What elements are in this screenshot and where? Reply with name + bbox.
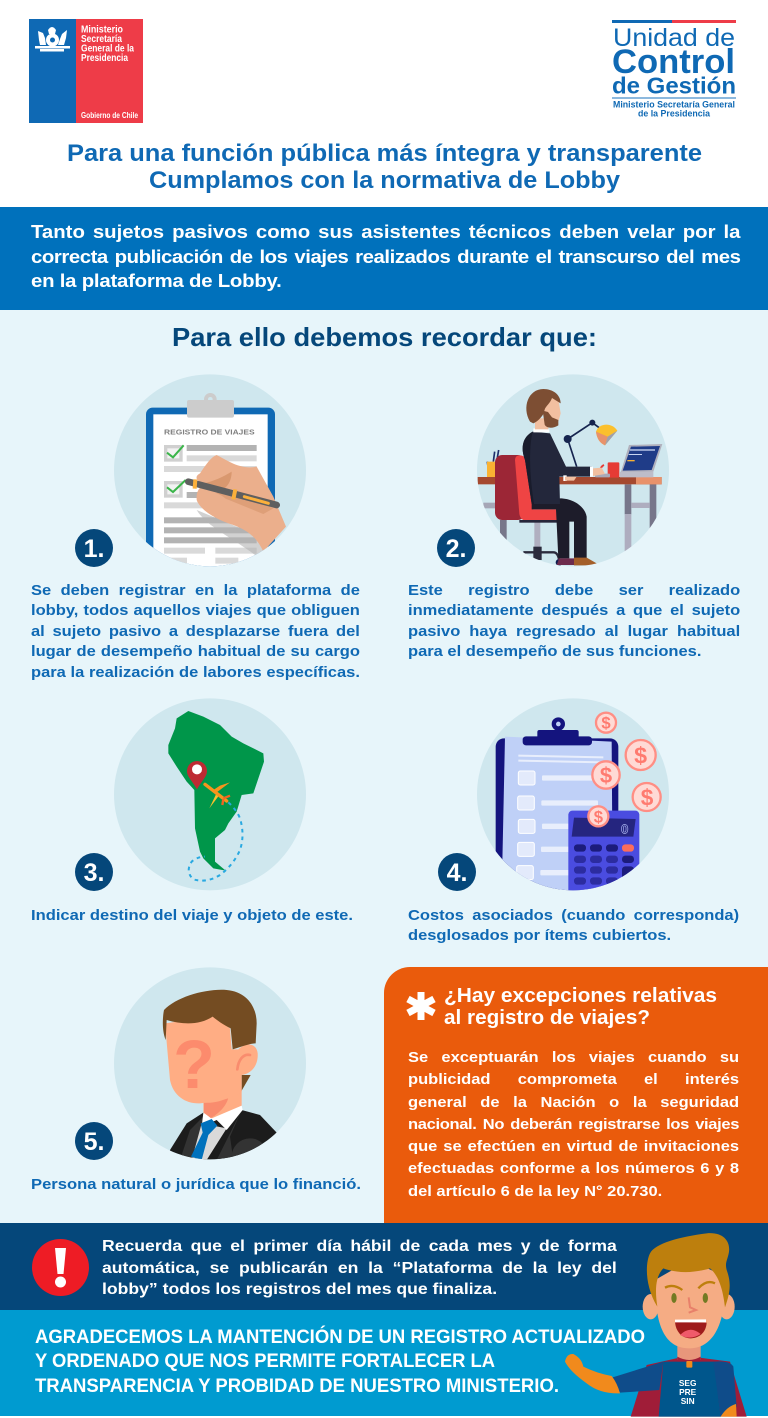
text: step 1: al sujeto pasivo a desplazarse fuera del — [31, 623, 360, 640]
illustration 4: clipboard, calculator and coins: $ — [634, 742, 647, 768]
badge: 4 — [438, 853, 476, 891]
text: step 5: Persona natural o jurídica que lo financió. — [31, 1176, 361, 1193]
title: Cumplamos con la normativa de Lobby — [149, 167, 621, 194]
text: step 1: lobby, todos aquellos viajes que obliguen — [31, 602, 360, 619]
text: step 4 — [408, 907, 739, 944]
logo: Unidad de Control de Gestión: Unidad de — [613, 24, 735, 52]
panel: light content background — [0, 310, 768, 1223]
badge: 2 — [437, 529, 475, 567]
text: step 2: Este registro debe ser realizado — [408, 582, 740, 599]
text: exceptions body: que se efectúen en virtud de invitaciones — [408, 1138, 739, 1155]
logo: Ministerio Secretaría General de la Presidencia: Ministerio — [81, 24, 123, 36]
illustration 1: clipboard with hand — [114, 374, 306, 566]
icon: asterisk — [406, 992, 436, 1020]
text: exceptions body: Se exceptuarán los viajes cuando su — [408, 1049, 739, 1066]
badge: 5 — [75, 1122, 113, 1160]
text: exceptions body — [408, 1049, 739, 1200]
title: Para una función pública más íntegra y transparente — [67, 140, 702, 167]
text: exceptions body: general de la Nación o la seguridad — [408, 1094, 739, 1111]
illustration 4: clipboard, calculator and coins: $ — [641, 784, 654, 810]
text: reminder — [102, 1238, 617, 1298]
text: step 4: desglosados por ítems cubiertos. — [408, 927, 671, 944]
text: thanks: AGRADECEMOS LA MANTENCIÓN DE UN REGISTRO ACTUALIZADO — [35, 1326, 645, 1348]
illustration 4: clipboard, calculator and coins — [477, 698, 669, 890]
illustration: superhero character — [565, 1233, 747, 1417]
heading: exceptions: al registro de viajes? — [444, 1007, 650, 1029]
heading: recordar: Para ello debemos recordar que: — [172, 322, 597, 352]
text: thanks — [35, 1326, 645, 1397]
logo: Unidad de Control de Gestión: Ministerio Secretaría General — [613, 100, 735, 110]
intro text: en la plataforma de Lobby. — [31, 270, 282, 291]
intro text: correcta publicación de los viajes realizados durante el transcurso del mes — [31, 246, 740, 266]
logo: Ministerio Secretaría General de la Presidencia: Gobierno de Chile — [81, 110, 138, 120]
text: step 2: para el desempeño de sus funciones. — [408, 643, 701, 660]
text: step 4: Costos asociados (cuando corresponda) — [408, 907, 739, 924]
intro text: Tanto sujetos pasivos como sus asistentes técnicos deben velar por la — [31, 221, 740, 242]
band: intro background — [0, 207, 768, 310]
text: step 2 — [408, 582, 740, 660]
heading: exceptions — [444, 985, 717, 1029]
badge: 1 — [75, 529, 113, 567]
logo: Ministerio Secretaría General de la Presidencia: Presidencia — [81, 53, 128, 64]
badge: 2: 2. — [446, 535, 466, 563]
text: step 1 — [31, 582, 360, 681]
text: step 2: inmediatamente después a que el sujeto — [408, 602, 740, 619]
logo: Unidad de Control de Gestión: de la Presidencia — [638, 108, 711, 118]
text: step 3: Indicar destino del viaje y objeto de este. — [31, 907, 353, 924]
logo: Unidad de Control de Gestión — [612, 20, 736, 118]
heading: exceptions: ¿Hay excepciones relativas — [444, 985, 717, 1007]
illustration: superhero character: PRE — [679, 1387, 697, 1397]
badge: 3: 3. — [84, 859, 104, 887]
logo: Ministerio Secretaría General de la Presidencia: General de la — [81, 44, 134, 54]
title — [67, 140, 702, 194]
text: step 2: pasivo haya regresado al lugar habitual — [408, 623, 740, 640]
panel: exceptions — [384, 967, 768, 1223]
illustration 4: clipboard, calculator and coins: $ — [594, 807, 604, 826]
intro text — [31, 221, 741, 291]
logo: Ministerio Secretaría General de la Presidencia: Secretaría — [81, 34, 122, 45]
logo: Unidad de Control de Gestión: Control — [612, 43, 735, 81]
illustration 1: clipboard with hand: REGISTRO DE VIAJES — [164, 428, 255, 437]
badge: 1: 1. — [84, 535, 104, 563]
text: exceptions body: nacional. No deberán registrarse los viajes — [408, 1116, 739, 1133]
text: exceptions body: publicidad comprometa el interés — [408, 1071, 739, 1088]
logo: Ministerio Secretaría General de la Presidencia — [29, 19, 143, 123]
text: exceptions body: del artículo 6 de la ley N° 20.730. — [408, 1183, 662, 1200]
text: step 1: Se deben registrar en la plataforma de — [31, 582, 360, 599]
text: step 1: lugar de desempeño habitual de su cargo — [31, 643, 360, 660]
text: thanks: TRANSPARENCIA Y PROBIDAD DE NUESTRO MINISTERIO. — [35, 1376, 559, 1397]
illustration: superhero character: SIN — [681, 1396, 695, 1406]
text: reminder: lobby” todos los registros del mes que finaliza. — [102, 1281, 497, 1298]
text: reminder: Recuerda que el primer día hábil de cada mes y de forma — [102, 1238, 617, 1255]
logo: Unidad de Control de Gestión: de Gestión — [612, 72, 736, 98]
illustration 5: anonymous person: ? — [173, 1027, 215, 1103]
text: thanks: Y ORDENADO QUE NOS PERMITE FORTALECER LA — [35, 1351, 495, 1372]
badge: 5: 5. — [84, 1128, 104, 1156]
band: reminder background — [0, 1223, 768, 1310]
text: step 1: para la realización de labores específicas. — [31, 664, 360, 681]
text: exceptions body: efectuadas conforme a los números 6 y 8 — [408, 1160, 739, 1177]
text: reminder: automática, se publicarán en la “Plataforma de la ley del — [102, 1260, 617, 1277]
illustration 2: person at desk — [477, 374, 669, 566]
badge: 4: 4. — [447, 859, 467, 887]
illustration 3: South America map — [114, 698, 306, 890]
band: thanks background — [0, 1310, 768, 1416]
illustration: superhero character: SEG — [679, 1378, 696, 1388]
illustration 4: clipboard, calculator and coins: 0 — [621, 822, 628, 837]
illustration 4: clipboard, calculator and coins: $ — [601, 714, 611, 733]
illustration 5: anonymous person — [114, 968, 306, 1160]
icon: alert — [32, 1239, 89, 1296]
illustration 4: clipboard, calculator and coins: $ — [600, 763, 612, 788]
badge: 3 — [75, 853, 113, 891]
